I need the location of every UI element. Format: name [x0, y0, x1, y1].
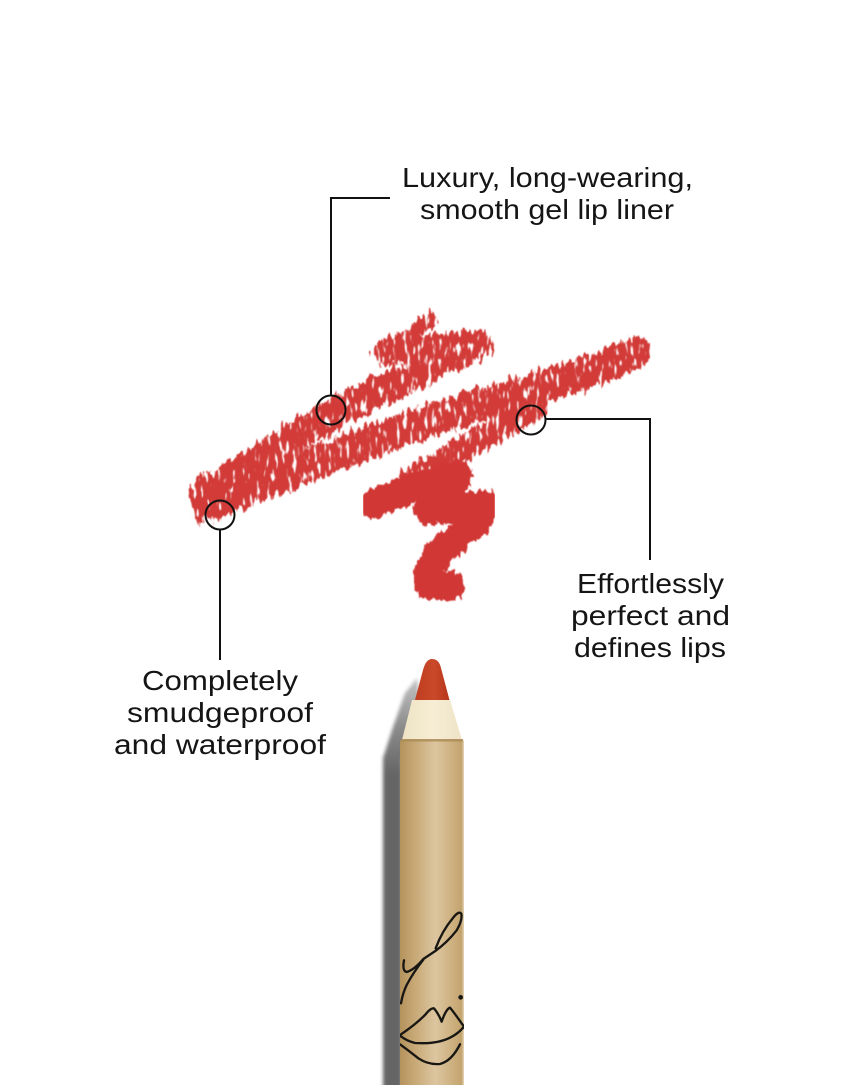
pencil gold barrel: [400, 740, 464, 1085]
marker circle: top: [316, 396, 346, 424]
pencil shadow: [383, 678, 420, 1085]
swatch: lower zigzag stroke: [374, 475, 484, 586]
marker circle: right: [516, 406, 546, 434]
logo: signature and lips: [400, 913, 464, 1064]
pencil wood: [402, 700, 462, 740]
callout: smudgeproof: [114, 500, 326, 760]
callout text: left: Completely: [142, 665, 298, 696]
callout text: right: [571, 568, 730, 663]
leader line: top: [331, 198, 390, 396]
swatch: long middle stroke: [205, 353, 634, 506]
callout: defines lips: [516, 406, 730, 663]
swatch: lower arm: [410, 408, 535, 480]
callout text: top: smooth gel lip liner: [420, 194, 674, 225]
logo: signature: [401, 913, 462, 1003]
callout text: top: [402, 162, 693, 225]
callout text: top: Luxury, long-wearing,: [402, 162, 693, 193]
callout text: left: [114, 665, 326, 760]
callout text: left: and waterproof: [114, 729, 326, 760]
callout: gel lip liner: [316, 162, 693, 424]
logo: mouth line: [400, 1027, 464, 1043]
swatch: upper stroke: [205, 319, 478, 494]
logo: upper lip: [400, 1008, 464, 1035]
callout text: left: smudgeproof: [127, 697, 313, 728]
leader line: right: [545, 419, 650, 560]
lip liner swatch: [205, 319, 634, 586]
callout text: right: Effortlessly: [577, 568, 724, 599]
infographic canvas: [115, 167, 728, 1085]
barrel top edge: [401, 739, 463, 742]
callout text: right: perfect and: [571, 600, 730, 631]
logo: dot: [459, 996, 462, 998]
callout text: right: defines lips: [574, 632, 726, 663]
pencil lead tip: [415, 659, 450, 700]
logo: lower lip: [400, 1044, 460, 1064]
marker circle: left: [206, 500, 234, 530]
pencil: [383, 659, 464, 1085]
leader line: left: [219, 530, 221, 660]
